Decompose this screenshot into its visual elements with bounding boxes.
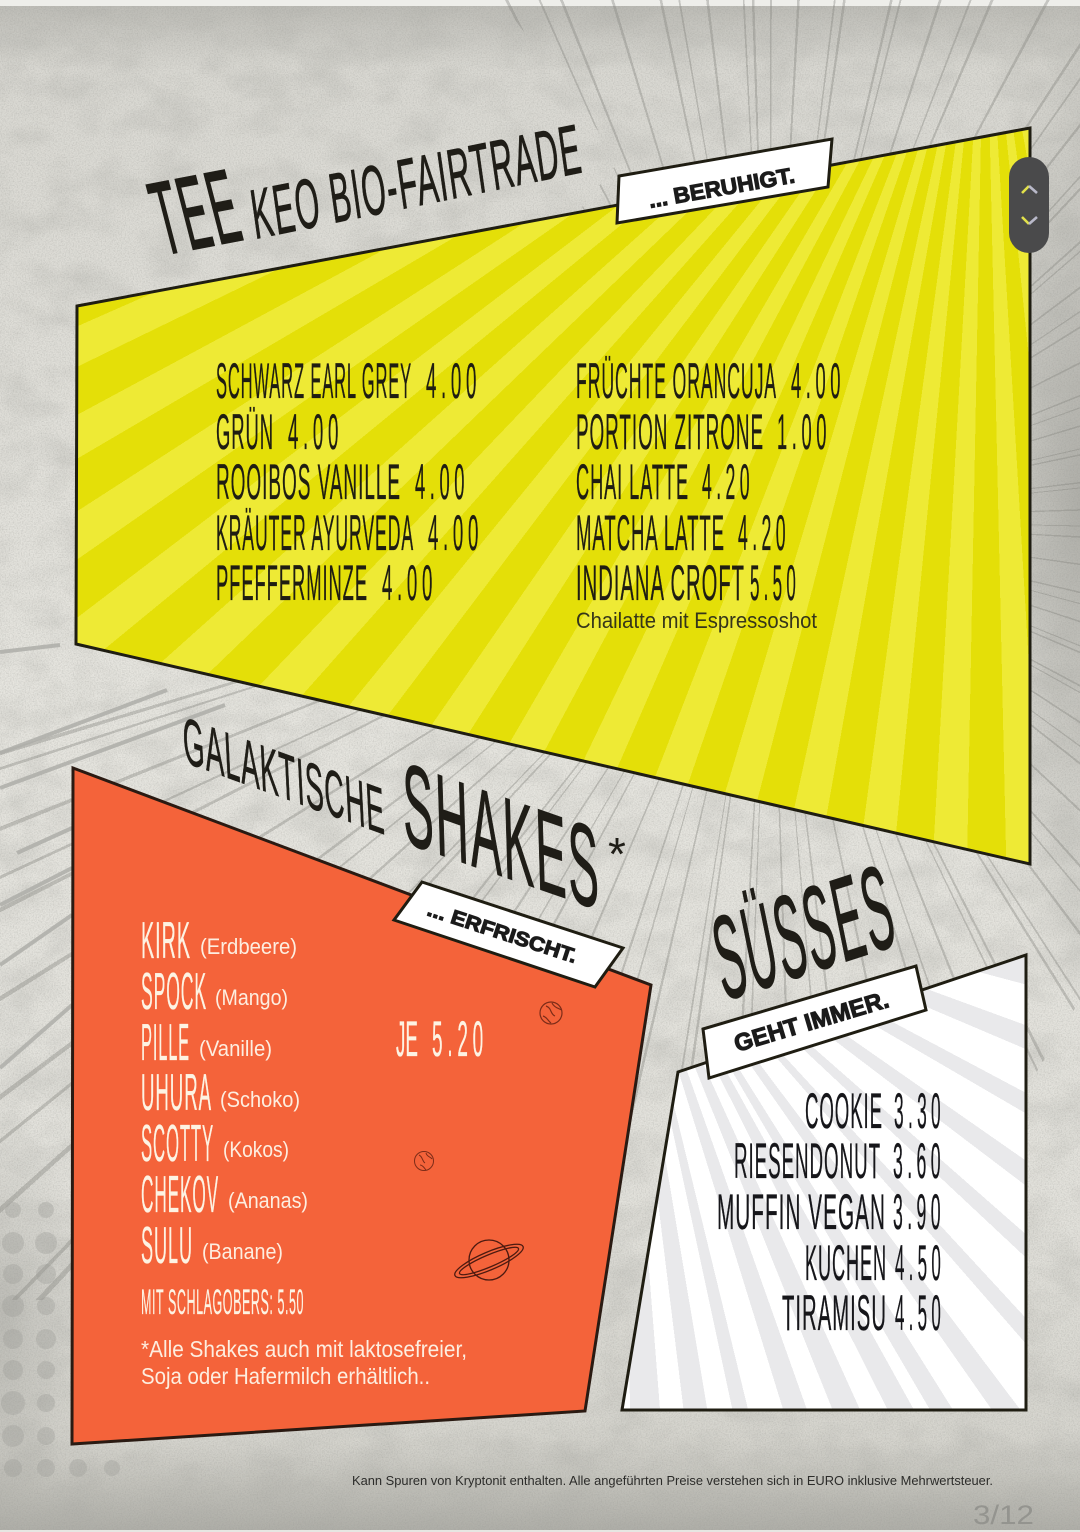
label: beruhigt: ... BERUHIGT.	[647, 163, 797, 213]
left thick rays	[0, 643, 226, 1070]
tea note: Chailatte mit Espressoshot	[576, 608, 817, 633]
icon: planet small middle	[414, 1152, 434, 1170]
shake flavour notes: (Erdbeere)	[200, 934, 297, 959]
panel: shakes: SCOTTY	[141, 1115, 214, 1173]
panel: tea sunburst	[76, 127, 1031, 865]
shake footnote: Soja oder Hafermilch erhältlich..	[141, 1363, 430, 1389]
tea panel outline and prices: 4.00	[791, 353, 845, 409]
panel: shakes: SPOCK	[141, 963, 207, 1021]
shake flavour notes: (Mango)	[215, 985, 288, 1010]
sweets prices: KUCHEN	[805, 1235, 887, 1291]
shake flavour notes: (Schoko)	[220, 1087, 300, 1112]
label: beruhigt	[617, 139, 832, 223]
tea prices right column: 5.50	[750, 555, 800, 611]
sweets panel outline and prices: 4.50	[895, 1235, 945, 1291]
tea prices right column: MATCHA LATTE	[576, 505, 725, 561]
tea panel outline and prices: 4.00	[428, 505, 483, 561]
tea prices right column: 4.20	[702, 454, 754, 510]
panel: sweets sunburst	[622, 955, 1027, 1411]
tea panel outline and prices: 4.00	[426, 353, 481, 409]
panel: shakes: 5.20	[432, 1011, 488, 1067]
shake flavour notes	[199, 934, 308, 1264]
tea prices left column: PFEFFERMINZE	[216, 555, 368, 611]
footer note: Kann Spuren von Kryptonit enthalten. Alle angeführten Preise verstehen sich in EURO inklusive Mehrwertsteuer.	[352, 1473, 993, 1488]
shake footnote	[141, 1336, 467, 1389]
shake flavour notes: (Banane)	[202, 1239, 283, 1264]
menu content layer: SHAKES	[401, 737, 602, 936]
tea prices right column	[576, 353, 845, 611]
panel: shakes: CHEKOV	[141, 1166, 219, 1224]
sweets panel outline and prices: 3.60	[893, 1133, 945, 1189]
tea prices right column: PORTION ZITRONE	[576, 404, 764, 460]
scroll control	[1009, 157, 1049, 253]
sweets panel outline and prices: 3.90	[893, 1184, 945, 1240]
label: erfrischt	[394, 882, 623, 987]
panel: shakes: MIT SCHLAGOBERS: 5.50	[141, 1283, 304, 1322]
heading: tea: TEE	[140, 148, 253, 277]
label: erfrischt: ... ERFRISCHT.	[424, 899, 580, 968]
tea panel outline and prices: 1.00	[777, 404, 831, 460]
shake flavours: PILLE	[141, 1014, 190, 1072]
shake flavours: SULU	[141, 1217, 193, 1275]
shake flavours	[141, 912, 219, 1275]
tea panel outline and prices: SCHWARZ EARL GREY	[216, 353, 412, 409]
label: geht immer	[703, 966, 926, 1078]
page number: 3/12	[973, 1500, 1034, 1530]
shake price: JE	[396, 1011, 418, 1067]
shake flavour notes: (Vanille)	[199, 1036, 272, 1061]
tea prices left column: 4.00	[382, 555, 437, 611]
halftone dots lower left	[1, 1202, 120, 1477]
menu content layer: KEO BIO-FAIRTRADE	[246, 109, 586, 254]
panel: shakes: UHURA	[141, 1064, 212, 1122]
tea prices left column: 4.00	[288, 404, 343, 460]
heading: tea	[140, 109, 586, 277]
sweets panel outline and prices	[622, 955, 1026, 1410]
sweets prices: TIRAMISU	[782, 1285, 887, 1341]
sweets prices	[717, 1083, 945, 1341]
sweets prices: COOKIE	[805, 1083, 883, 1139]
tea prices right column: 4.20	[738, 505, 790, 561]
tea panel outline and prices: KRÄUTER AYURVEDA	[216, 505, 414, 561]
tea prices right column: INDIANA CROFT	[576, 555, 745, 611]
tea prices left column	[216, 353, 483, 611]
tea prices right column: CHAI LATTE	[576, 454, 689, 510]
tea prices left column: GRÜN	[216, 404, 274, 460]
icon: chevron up	[1022, 186, 1037, 193]
icon: ringed planet	[451, 1238, 527, 1284]
shake flavour notes: (Ananas)	[228, 1188, 308, 1213]
tea prices left column: ROOIBOS VANILLE	[216, 454, 401, 510]
icon: planet small top	[540, 1002, 562, 1024]
shake footnote: *Alle Shakes auch mit laktosefreier,	[141, 1336, 467, 1362]
icon: chevron down	[1022, 217, 1037, 224]
shake flavour notes: (Kokos)	[223, 1137, 289, 1162]
sweets panel outline and prices: 4.50	[895, 1285, 945, 1341]
label: geht immer: GEHT IMMER.	[731, 986, 892, 1058]
sweets panel outline and prices: 3.30	[894, 1083, 945, 1139]
heading: shakes: *	[608, 828, 626, 880]
heading: shakes: GALAKTISCHE	[181, 702, 387, 849]
tea panel outline and prices: 4.00	[415, 454, 469, 510]
panel: shakes	[72, 768, 651, 1444]
tea panel outline and prices	[76, 128, 1030, 864]
shake price	[396, 1011, 488, 1067]
shake flavours: KIRK	[141, 912, 191, 970]
